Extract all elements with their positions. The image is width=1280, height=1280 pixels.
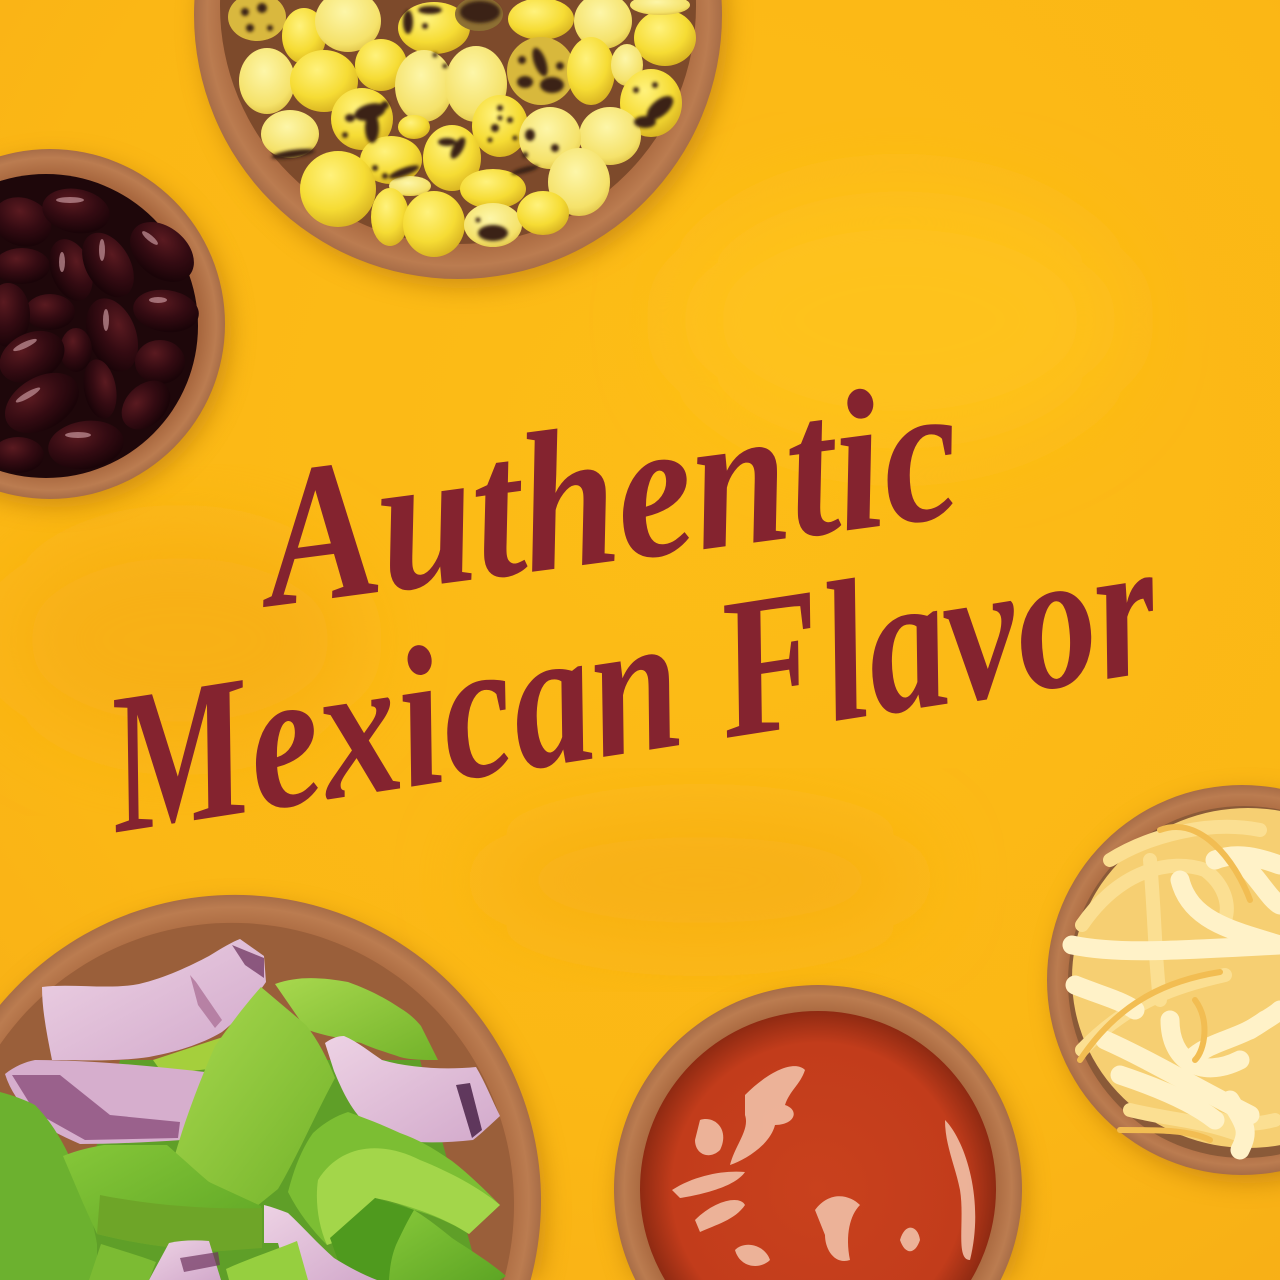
corn kernels xyxy=(228,0,696,257)
cheese shreds xyxy=(1072,827,1280,1150)
bowl: shredded cheese xyxy=(1047,785,1280,1183)
bowl: charred corn xyxy=(194,0,728,288)
char marks xyxy=(241,1,677,241)
headline: Authentic Mexican Flavor xyxy=(89,339,1174,876)
vegetable pieces xyxy=(0,939,506,1280)
bowl: black beans xyxy=(0,149,231,507)
beans xyxy=(0,183,206,474)
bean highlights xyxy=(12,197,167,438)
bowl: red salsa xyxy=(614,985,1026,1280)
headline line: Authentic: Authentic xyxy=(239,339,972,651)
cheese mound xyxy=(1072,808,1280,1148)
salsa glossy highlights xyxy=(672,1066,975,1266)
bowl: peppers and onions xyxy=(0,895,546,1280)
